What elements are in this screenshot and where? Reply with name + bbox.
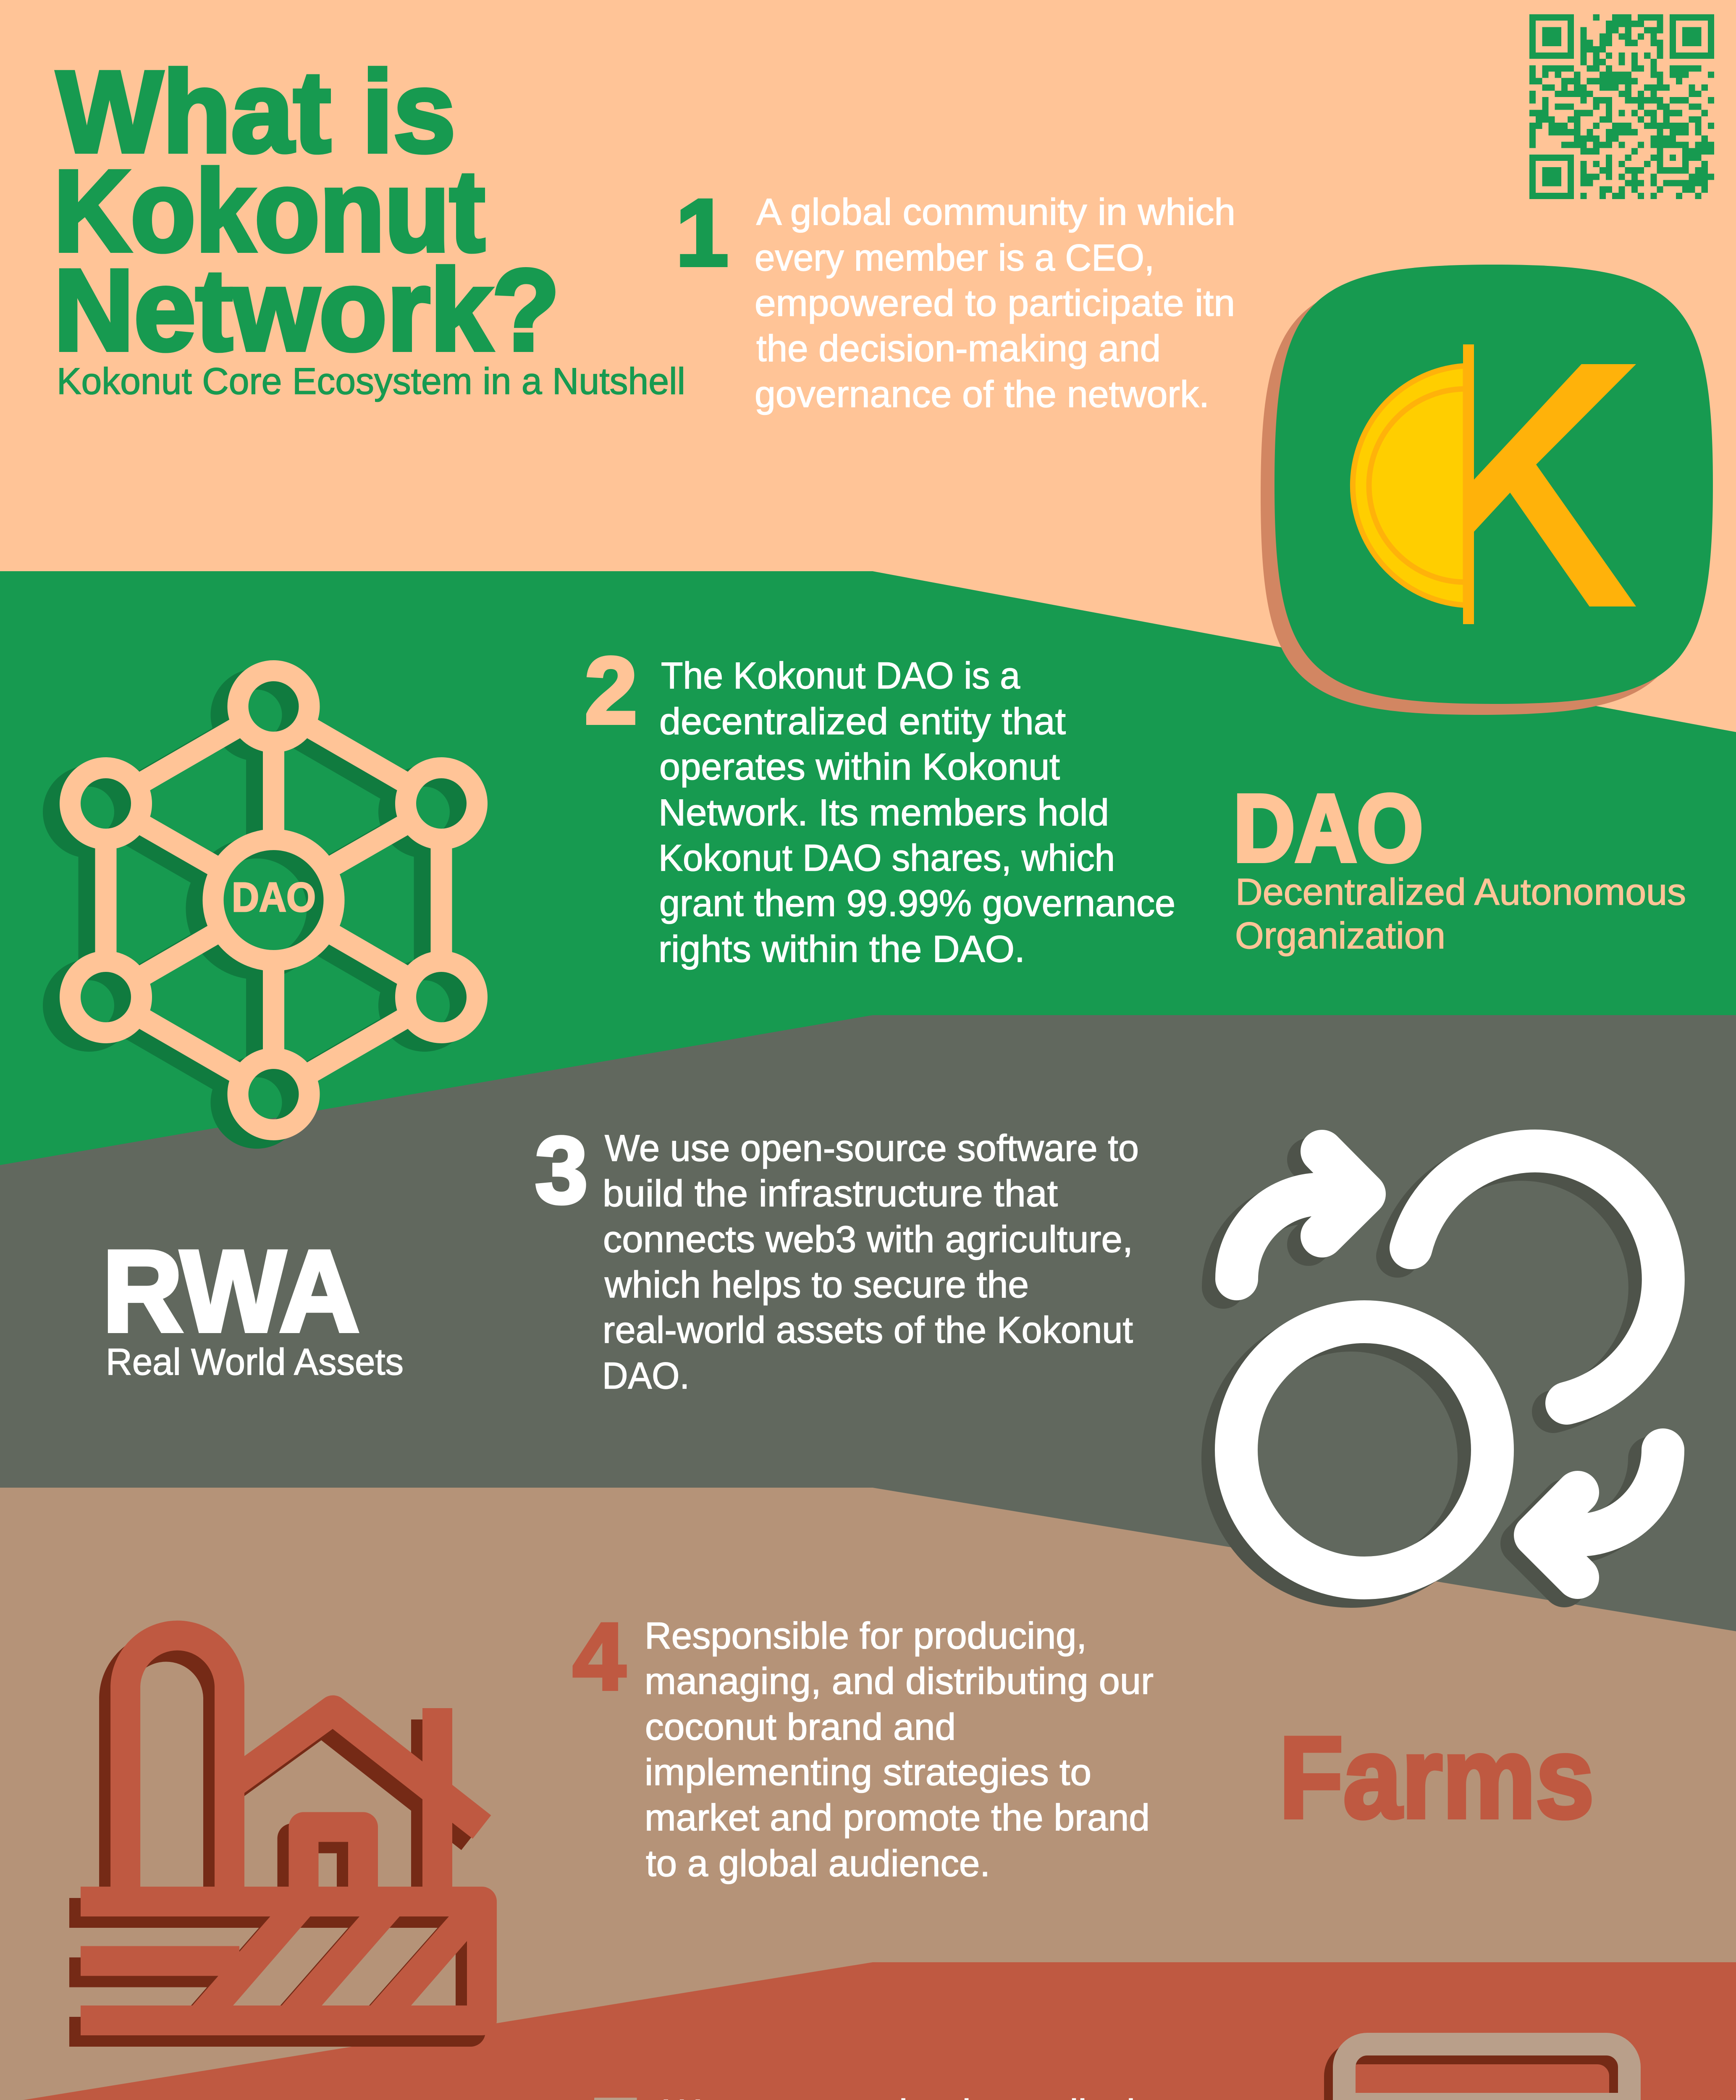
logo tile: [1274, 265, 1713, 704]
text block: open-source infrastructure: DAO.: [602, 1354, 690, 1396]
panel: MRV band: [0, 1962, 1736, 2100]
text block: farms description: to a global audience.: [646, 1842, 990, 1884]
text block: community description: the decision-making and: [756, 327, 1161, 369]
title: Network?: [54, 246, 560, 375]
text block: open-source infrastructure: connects web3 with agriculture,: [603, 1218, 1133, 1260]
subheading: Decentralized Autonomous Organization: [1235, 871, 1686, 956]
number 4: 4: [573, 1603, 626, 1709]
icon: report and verified shield: [1335, 2044, 1675, 2100]
heading: RWA: RWA: [102, 1227, 359, 1356]
title: [54, 47, 560, 375]
report shield shadow: [1335, 2053, 1666, 2100]
text block: farms description: [645, 1614, 1154, 1884]
text block: DAO description: Network. Its members hold: [658, 791, 1109, 833]
text block: DAO description: rights within the DAO.: [658, 928, 1025, 970]
network center label: DAO: [232, 874, 316, 920]
text block: farms description: implementing strategies to: [645, 1751, 1091, 1793]
title: Kokonut: [54, 147, 485, 276]
icon: DAO network: [53, 671, 477, 1138]
title: What is: [57, 47, 456, 176]
text block: DAO description: grant them 99.99% governance: [659, 882, 1175, 924]
subheading: Decentralized Autonomous Organization: Decentralized Autonomous: [1235, 871, 1686, 913]
text block: farms description: Responsible for producing,: [645, 1614, 1087, 1656]
text block: community description: A global community in which: [756, 191, 1235, 233]
icon: Kokonut logo: [1261, 265, 1713, 715]
panel: Farms band: [0, 1488, 1736, 2100]
icon: circular arrows: [1223, 1151, 1663, 1586]
letter K: [1463, 344, 1636, 624]
text block: open-source infrastructure: which helps to secure the: [604, 1263, 1029, 1305]
panel: RWA band: [0, 1015, 1736, 2100]
network shadow: [53, 679, 460, 1138]
number 3: 3: [535, 1117, 588, 1223]
report shield foreground: [1344, 2044, 1675, 2100]
text block: open-source infrastructure: build the infrastructure that: [603, 1172, 1058, 1214]
text block: community description: empowered to participate itn: [755, 282, 1235, 324]
subheading: Decentralized Autonomous Organization: Organization: [1235, 914, 1445, 956]
text block: DAO description: Kokonut DAO shares, which: [658, 837, 1115, 879]
heading: Farms: Farms: [1279, 1713, 1594, 1842]
farm shadow: [69, 1647, 477, 2032]
number 1: 1: [676, 179, 729, 286]
subheading: Real World Assets: Real World Assets: [106, 1341, 404, 1383]
text block: open-source infrastructure: We use open-source software to: [605, 1127, 1139, 1169]
text block: open-source infrastructure: real-world assets of the Kokonut: [603, 1309, 1133, 1351]
text block: community description: every member is a CEO,: [755, 236, 1154, 278]
text block: farms description: coconut brand and: [645, 1706, 956, 1748]
number 2: 2: [585, 637, 637, 743]
text block: DAO description: [658, 654, 1175, 970]
text block: DAO description: decentralized entity that: [659, 700, 1066, 742]
logo shadow: [1261, 276, 1699, 715]
text block: farms description: managing, and distributing our: [645, 1660, 1154, 1702]
icon: farm: [69, 1635, 489, 2032]
QR code: [1529, 18, 1714, 196]
subtitle: Kokonut Core Ecosystem in a Nutshell: [57, 360, 685, 402]
heading: DAO: DAO: [1233, 775, 1423, 882]
text block: community description: [755, 191, 1235, 415]
text block: community description: governance of the network.: [755, 373, 1209, 415]
arrows shadow: [1223, 1159, 1650, 1586]
panel: DAO band: [0, 571, 1736, 2100]
text block: farms description: market and promote the brand: [645, 1796, 1150, 1838]
text block: DAO description: operates within Kokonut: [659, 746, 1060, 788]
arrows foreground: [1236, 1151, 1663, 1578]
farm foreground: [81, 1635, 489, 2020]
half coin: [1353, 366, 1466, 605]
network graph: [70, 671, 477, 1130]
text block: DAO description: The Kokonut DAO is a: [661, 654, 1020, 696]
text block: open-source infrastructure: [602, 1127, 1139, 1396]
